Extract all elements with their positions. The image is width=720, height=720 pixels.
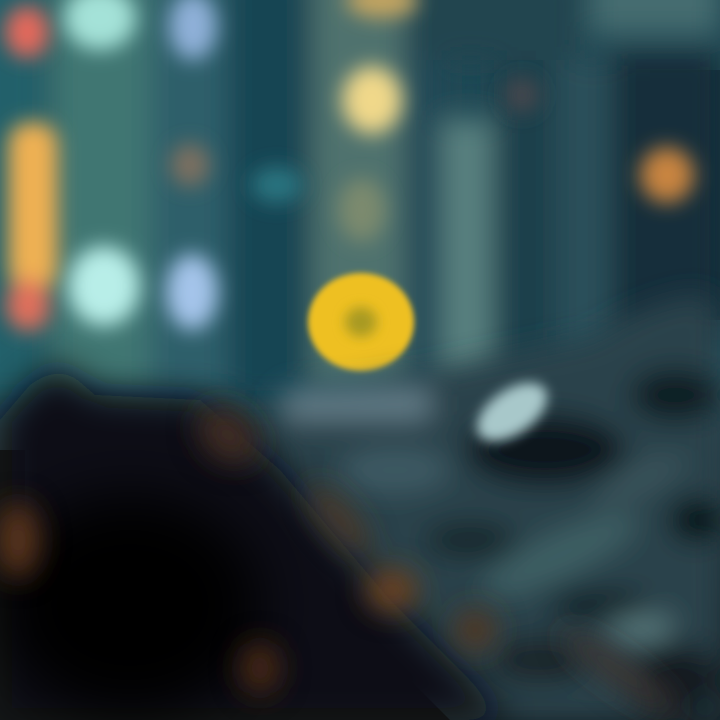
foreground: dark silhouette [0, 365, 685, 720]
lamp: dim lower [338, 178, 386, 242]
light: dim red [504, 77, 540, 113]
street lamps: centre [338, 0, 418, 242]
neon sign: teal glow [251, 167, 303, 203]
foreground: brown edges [0, 393, 685, 720]
light: orange window [640, 147, 694, 203]
neon sign: blue lower [166, 254, 218, 330]
right side lights [504, 77, 694, 203]
neon lights: left building [5, 0, 303, 331]
neon sign: dim amber [170, 143, 210, 187]
foreground: base under blur [0, 450, 450, 720]
right building base [650, 70, 720, 320]
icon: gold coin [308, 273, 414, 371]
lamp: yellow glow [342, 66, 402, 134]
rubble: right grey debris [270, 281, 720, 720]
buildings [0, 0, 720, 400]
neon sign: orange column [6, 122, 58, 331]
highlight: white shard [467, 371, 557, 453]
lamp: top [346, 0, 418, 18]
neon sign: blue top [169, 0, 217, 60]
neon sign: pale cyan top [64, 0, 136, 50]
neon sign: pale cyan lower [68, 246, 140, 326]
neon sign: red top [5, 6, 49, 58]
